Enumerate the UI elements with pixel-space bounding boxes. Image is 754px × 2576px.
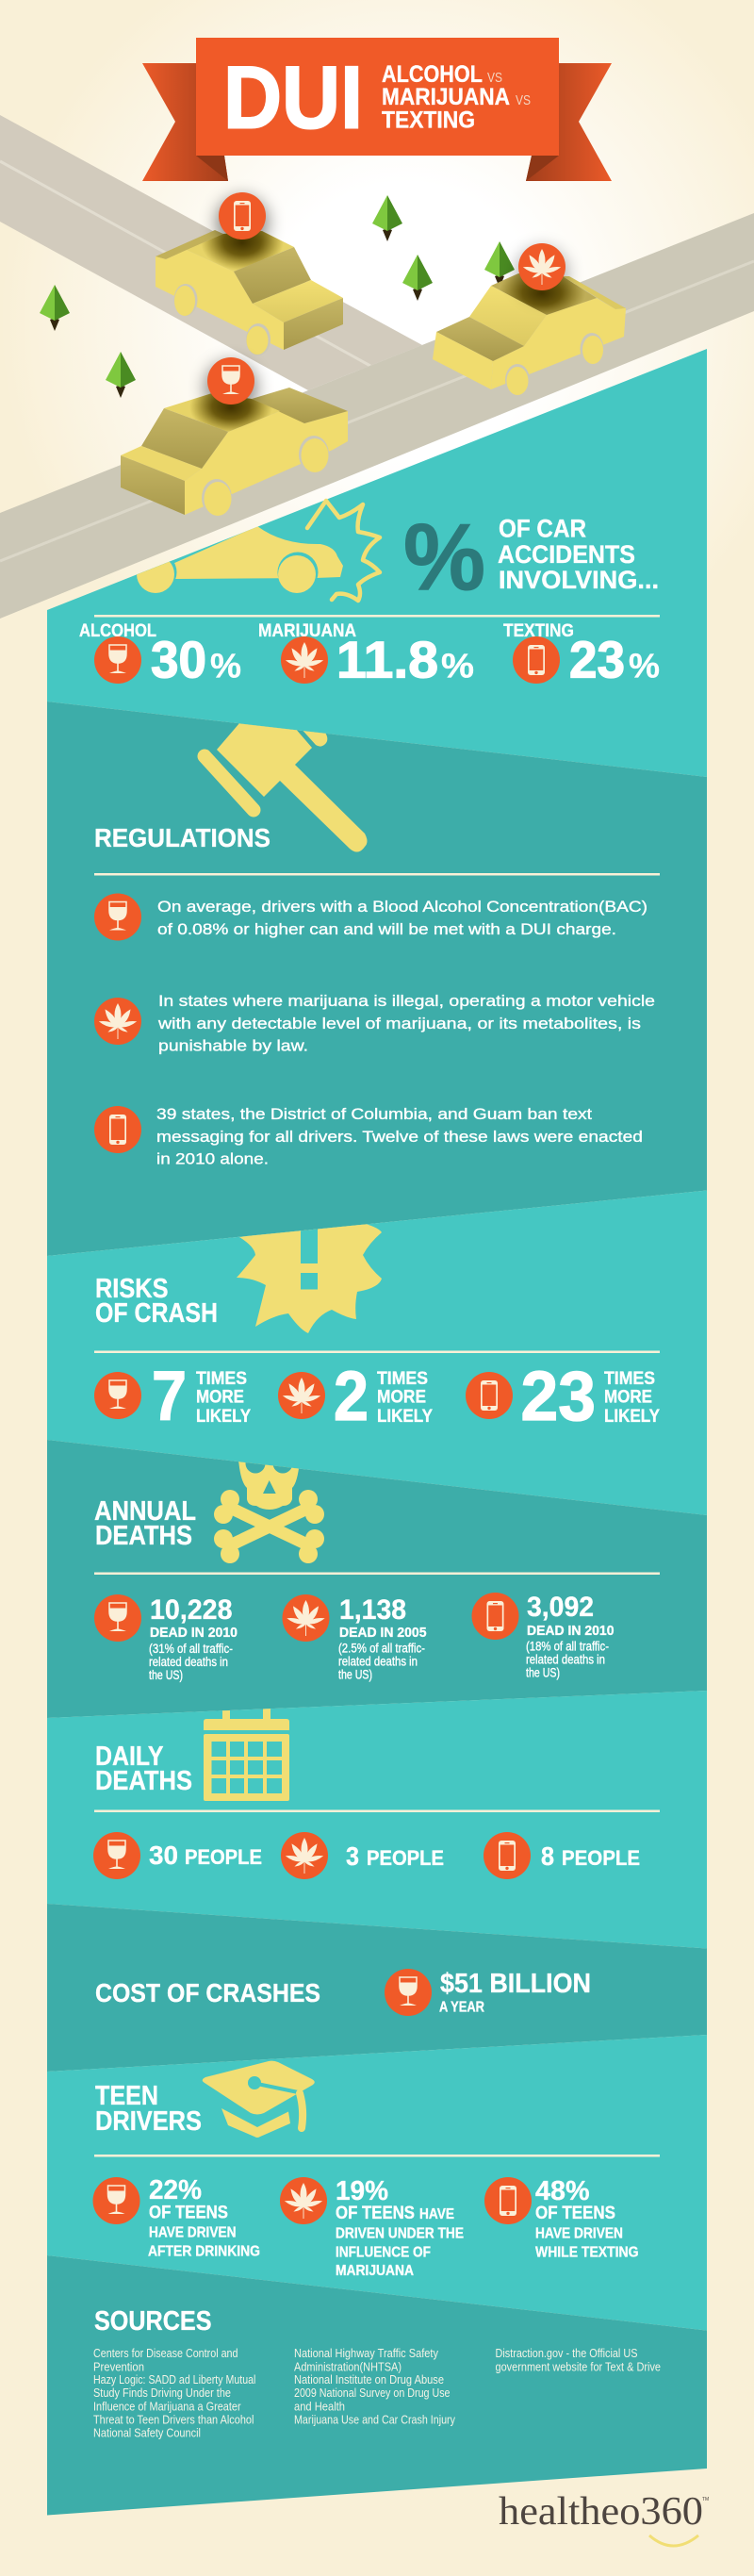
subtitle: VS (487, 70, 502, 86)
risk: texting 23 times: LIKELY (604, 1407, 660, 1427)
sources column 3: government website for Text & Drive (496, 2359, 661, 2373)
deaths: texting: related deaths in (526, 1653, 605, 1667)
car with wine glass icon (121, 357, 348, 517)
sources column 3: Distraction.gov - the Official US (496, 2346, 638, 2360)
sources column 2: National Institute on Drug Abuse (294, 2372, 444, 2386)
daily: marijuana: PEOPLE (367, 1846, 444, 1870)
heading: annual deaths: ANNUAL (94, 1496, 196, 1527)
risk: texting 23 times: 23 (520, 1357, 596, 1435)
logo: healtheo360: healtheo360 (499, 2490, 703, 2534)
tree (106, 352, 136, 398)
heading: daily deaths (95, 1742, 192, 1796)
sources column 1: Influence of Marijuana a Greater (93, 2399, 241, 2413)
regulation: texting: in 2010 alone. (156, 1150, 269, 1168)
tree (372, 195, 402, 241)
tree (484, 241, 515, 288)
deaths: alcohol: the US) (149, 1668, 183, 1682)
sources column 2: National Highway Traffic Safety (294, 2346, 438, 2360)
teen: alcohol: AFTER DRINKING (148, 2244, 260, 2260)
risk: alcohol 7 times: 7 (152, 1357, 187, 1435)
regulation: marijuana: In states where marijuana is illegal, operating a motor vehicle (158, 992, 655, 1010)
title banner (142, 38, 612, 181)
deaths: alcohol: related deaths in (149, 1655, 228, 1669)
teen: marijuana: 19% (336, 2176, 388, 2206)
sources column 2 (294, 2346, 455, 2427)
daily: texting: 8 (541, 1841, 554, 1871)
stat: marijuana 11.8% (258, 621, 474, 689)
stat: cost: A YEAR (439, 1999, 484, 2016)
heading: regulations: REGULATIONS (94, 823, 270, 852)
teen: texting (484, 2176, 639, 2261)
stat: alcohol 30%: 30 (151, 631, 206, 689)
logo: healtheo360: TM (702, 2497, 709, 2502)
heading: cost of crashes: COST OF CRASHES (95, 1978, 320, 2007)
subtitle: TEXTING (382, 107, 475, 134)
regulation: alcohol: On average, drivers with a Blood Alcohol Concentration(BAC) (157, 898, 647, 916)
teen: marijuana: OF TEENS (336, 2203, 415, 2223)
sources column 2: Administration(NHTSA) (294, 2359, 402, 2373)
deaths: texting: 3,092 (527, 1592, 594, 1623)
heading: percent of car accidents involving: ACCIDENTS (498, 540, 635, 569)
deaths: texting (471, 1592, 615, 1680)
daily: alcohol: PEOPLE (185, 1845, 262, 1869)
sources column 2: Marijuana Use and Car Crash Injury (294, 2412, 455, 2427)
tree (40, 285, 70, 331)
heading: percent of car accidents involving (403, 504, 659, 610)
stat: texting 23%: 23 (569, 631, 625, 689)
risk: marijuana 2 times (278, 1357, 433, 1435)
heading: risks of crash: RISKS (95, 1274, 168, 1304)
risk: texting 23 times: MORE (604, 1388, 652, 1407)
icon: skull and crossbones (214, 1461, 324, 1563)
stat: marijuana 11.8%: 11.8 (336, 631, 438, 689)
regulation: texting: 39 states, the District of Columbia, and Guam ban text (156, 1105, 592, 1123)
sources column 1: Hazy Logic: SADD ad Liberty Mutual (93, 2372, 255, 2386)
icon: graduation cap (203, 2061, 315, 2138)
teen: alcohol (92, 2175, 260, 2260)
deaths: alcohol: DEAD IN 2010 (150, 1625, 238, 1641)
risk: texting 23 times: TIMES (604, 1369, 655, 1389)
daily: texting (484, 1832, 640, 1879)
stat: alcohol 30% (79, 621, 241, 689)
subtitle: VS (516, 92, 531, 108)
subtitle: ALCOHOL (382, 61, 483, 88)
daily: marijuana (281, 1832, 444, 1879)
teen: marijuana: DRIVEN UNDER THE (336, 2226, 464, 2242)
sources column 3 (496, 2346, 661, 2373)
stat: texting 23%: % (629, 647, 660, 685)
deaths: texting: DEAD IN 2010 (527, 1623, 615, 1639)
risk: texting 23 times (466, 1357, 660, 1435)
regulation: texting (94, 1105, 643, 1168)
stat: cost (385, 1969, 591, 2016)
sources column 2: 2009 National Survey on Drug Use (294, 2386, 451, 2400)
sources column 2: and Health (294, 2399, 345, 2413)
heading: daily deaths: DEATHS (95, 1766, 192, 1796)
heading: percent of car accidents involving: INVOLVING... (499, 566, 659, 594)
deaths: alcohol (94, 1594, 238, 1682)
teen: texting: OF TEENS (535, 2203, 615, 2223)
car with phone icon (156, 192, 343, 355)
heading: percent of car accidents involving: OF CAR (499, 515, 586, 543)
icon: exclamation splat (237, 1216, 382, 1333)
deaths: marijuana: 1,138 (339, 1594, 406, 1626)
stat: alcohol 30%: ALCOHOL (79, 621, 156, 641)
risk: alcohol 7 times: MORE (196, 1388, 244, 1407)
teen: texting: WHILE TEXTING (535, 2244, 639, 2261)
daily: alcohol: 30 (149, 1841, 178, 1870)
regulation: texting: messaging for all drivers. Twelve of these laws were enacted (156, 1128, 643, 1146)
deaths: marijuana: related deaths in (338, 1655, 418, 1669)
heading: annual deaths: DEATHS (95, 1521, 192, 1551)
sources column 1: Prevention (93, 2359, 144, 2373)
deaths: texting: (18% of all traffic- (526, 1640, 609, 1654)
heading: risks of crash (95, 1274, 218, 1329)
risk: alcohol 7 times: TIMES (196, 1369, 247, 1389)
deaths: marijuana: (2.5% of all traffic- (338, 1642, 425, 1656)
teen: marijuana: MARIJUANA (336, 2263, 414, 2279)
risk: marijuana 2 times: MORE (377, 1388, 426, 1407)
regulation: alcohol (94, 894, 647, 941)
heading: sources: SOURCES (94, 2306, 211, 2337)
deaths: alcohol: 10,228 (150, 1594, 232, 1626)
stat: cost: $51 BILLION (440, 1969, 591, 1999)
sources column 1: Centers for Disease Control and (93, 2346, 238, 2360)
regulation: marijuana: with any detectable level of marijuana, or its metabolites, is (157, 1015, 641, 1032)
teen: alcohol: HAVE DRIVEN (149, 2225, 236, 2240)
heading: annual deaths (94, 1496, 196, 1551)
teen: alcohol: 22% (149, 2175, 202, 2205)
car with marijuana icon (433, 243, 626, 396)
risk: alcohol 7 times: LIKELY (196, 1407, 251, 1427)
icon: crashed car (136, 526, 343, 593)
teen: alcohol: OF TEENS (149, 2203, 228, 2223)
deaths: marijuana: DEAD IN 2005 (339, 1625, 426, 1641)
icon: crash burst (307, 501, 380, 601)
heading: risks of crash: OF CRASH (95, 1298, 218, 1329)
road: diagonal left (0, 115, 422, 390)
stat: alcohol 30%: % (210, 647, 241, 685)
risk: marijuana 2 times: TIMES (377, 1369, 428, 1389)
teen: marijuana: INFLUENCE OF (336, 2244, 431, 2261)
stat: marijuana 11.8%: % (441, 647, 474, 685)
daily: marijuana: 3 (346, 1841, 359, 1871)
stat: texting 23% (503, 621, 660, 689)
road: diagonal right (0, 213, 754, 619)
sources column 1: Threat to Teen Drivers than Alcohol (93, 2412, 254, 2427)
sources column 1 (93, 2346, 255, 2440)
teen: marijuana (280, 2176, 464, 2279)
sources column 1: Study Finds Driving Under the (93, 2386, 231, 2400)
deaths: texting: the US) (526, 1666, 560, 1680)
daily: texting: PEOPLE (562, 1846, 640, 1870)
teen: texting: 48% (535, 2176, 590, 2206)
heading: percent of car accidents involving: % (403, 504, 485, 610)
sources column 1: National Safety Council (93, 2426, 201, 2440)
icon: calendar (204, 1709, 289, 1801)
risk: alcohol 7 times (94, 1357, 251, 1435)
teal panel background bands (47, 349, 707, 2516)
heading: daily deaths: DAILY (95, 1742, 164, 1772)
tree (402, 255, 433, 301)
regulation: alcohol: of 0.08% or higher can and will be met with a DUI charge. (157, 920, 616, 938)
title: DUI: DUI (223, 47, 363, 147)
heading: teen drivers: TEEN (95, 2081, 158, 2111)
deaths: marijuana: the US) (338, 1668, 372, 1682)
deaths: alcohol: (31% of all traffic- (149, 1642, 233, 1656)
heading: teen drivers: DRIVERS (95, 2106, 202, 2137)
subtitle (382, 61, 531, 134)
daily: alcohol (93, 1832, 262, 1879)
stat: texting 23%: TEXTING (503, 621, 574, 641)
risk: marijuana 2 times: 2 (334, 1357, 369, 1435)
stat: marijuana 11.8%: MARIJUANA (258, 621, 356, 641)
icon: gavel (205, 717, 368, 852)
heading: teen drivers (95, 2081, 202, 2137)
teen: texting: HAVE DRIVEN (535, 2226, 623, 2242)
teen: marijuana: HAVE (419, 2206, 454, 2222)
regulation: marijuana (94, 992, 655, 1055)
risk: marijuana 2 times: LIKELY (377, 1407, 433, 1427)
regulation: marijuana: punishable by law. (158, 1037, 308, 1055)
deaths: marijuana (283, 1594, 426, 1682)
subtitle: MARIJUANA (382, 84, 510, 110)
